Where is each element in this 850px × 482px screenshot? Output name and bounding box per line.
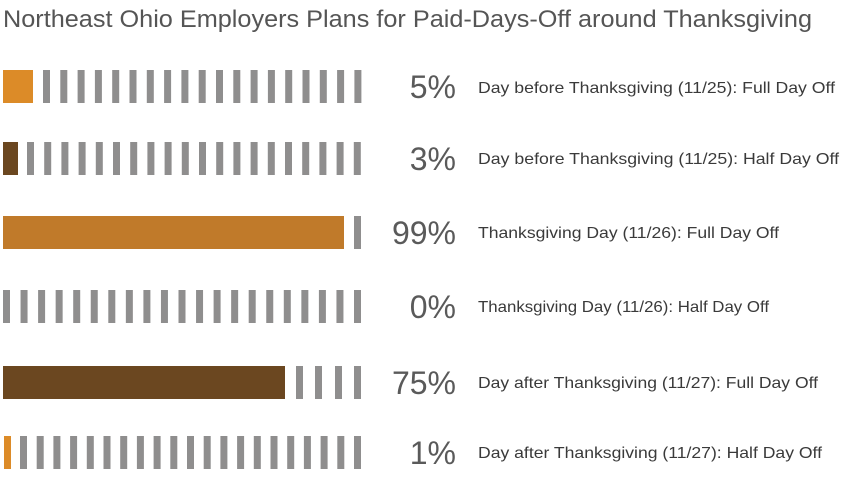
row 4: thanksgiving half day off: 0% xyxy=(410,289,456,325)
row 6: day after half day off xyxy=(4,435,823,471)
row 4: thanksgiving half day off xyxy=(3,289,770,325)
title: Northeast Ohio Employers Plans for Paid-Days-Off around Thanksgiving xyxy=(3,6,812,33)
row 3: thanksgiving full day off xyxy=(3,215,780,251)
row 6: day after half day off: 1% xyxy=(410,435,456,471)
row 5: day after full day off: 75% xyxy=(392,365,456,401)
row 4: thanksgiving half day off: Thanksgiving Day (11/26): Half Day Off xyxy=(478,299,770,316)
row 3: thanksgiving full day off: 99% xyxy=(392,215,456,251)
row 5: day after full day off: Day after Thanksgiving (11/27): Full Day Off xyxy=(478,375,819,392)
row 6: day after half day off: Day after Thanksgiving (11/27): Half Day Off xyxy=(478,445,823,462)
row 1: day before full day off: Day before Thanksgiving (11/25): Full Day Off xyxy=(478,80,836,97)
row 5: day after full day off xyxy=(3,365,819,401)
row 2: day before half day off xyxy=(3,141,840,177)
row 3: thanksgiving full day off: Thanksgiving Day (11/26): Full Day Off xyxy=(478,225,780,242)
row 2: day before half day off: Day before Thanksgiving (11/25): Half Day Off xyxy=(478,151,840,168)
row 1: day before full day off xyxy=(3,69,836,105)
row 1: day before full day off: 5% xyxy=(410,69,456,105)
row 2: day before half day off: 3% xyxy=(410,141,456,177)
